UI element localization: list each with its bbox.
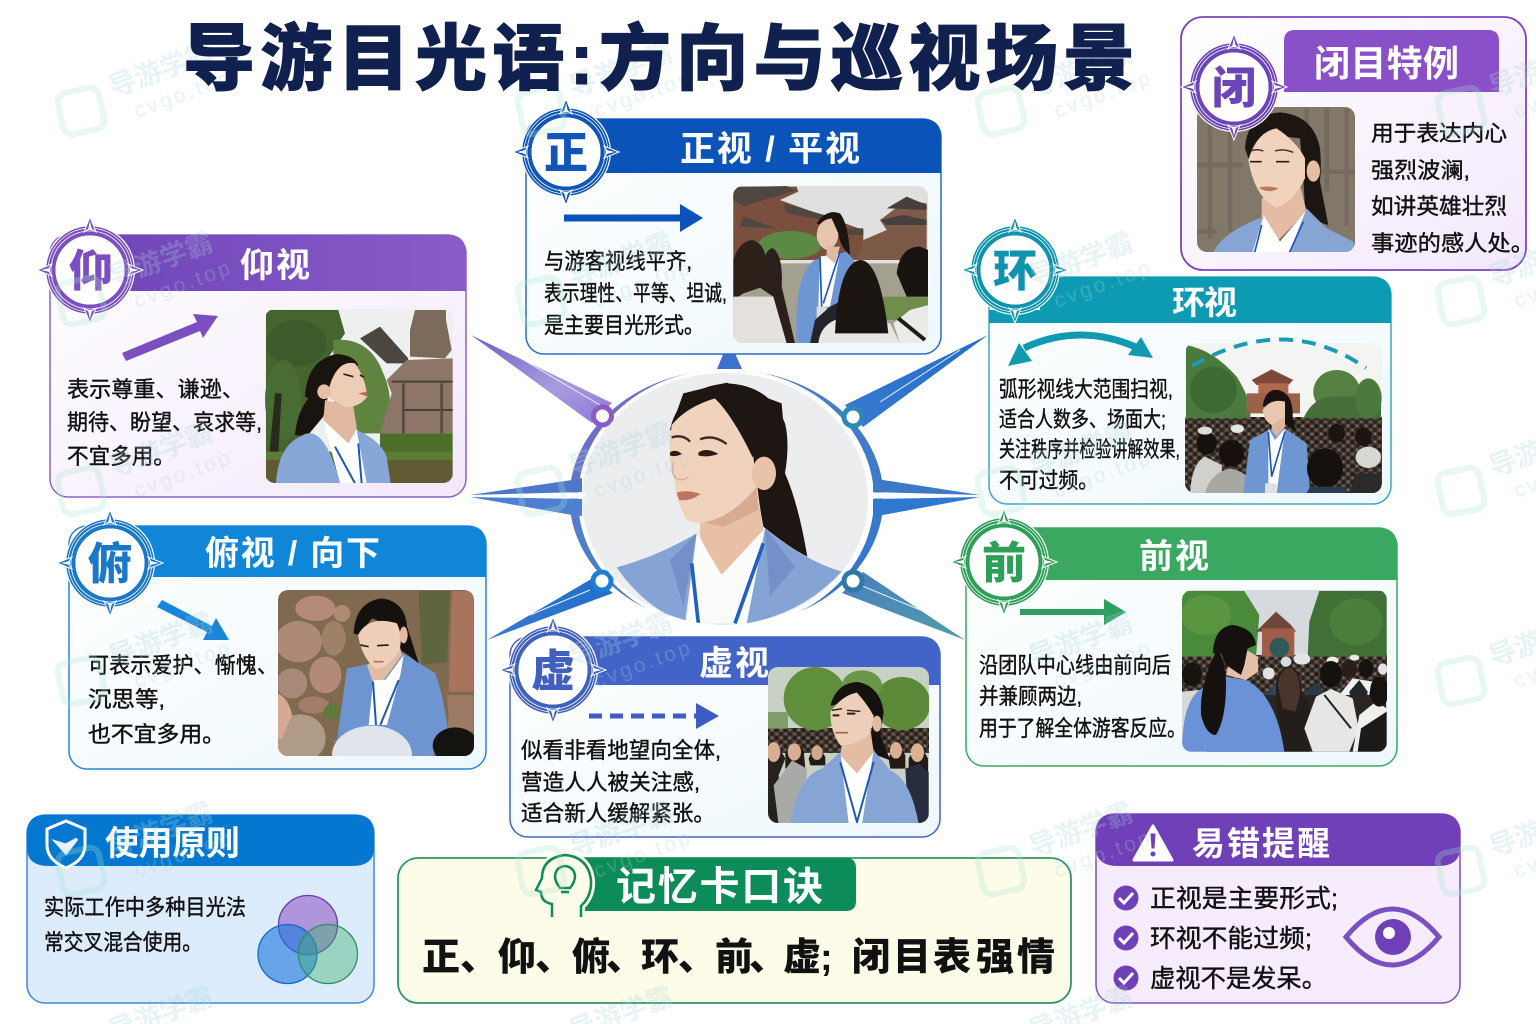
photo: guide scanning crowd xyxy=(1185,343,1382,493)
panel: 易错提醒 xyxy=(1096,814,1460,1003)
icon: venn diagram xyxy=(258,896,358,984)
heading: 记忆卡口诀 xyxy=(616,865,823,909)
panel: 记忆卡口诀 xyxy=(398,855,1071,1003)
icon: compass medal 仰 xyxy=(37,217,143,323)
heading: 易错提醒 xyxy=(1192,825,1330,862)
text block: 如讲英雄壮烈 xyxy=(1371,194,1507,219)
text: cvgo.top xyxy=(131,256,236,313)
text: cvgo.top xyxy=(591,256,696,313)
text block: 沉思等, xyxy=(88,687,165,712)
card header xyxy=(95,235,466,291)
list: reminders xyxy=(1114,885,1338,993)
text: cvgo.top xyxy=(591,66,696,123)
text block: 弧形视线大范围扫视, xyxy=(999,377,1173,402)
panel: 虚视 xyxy=(500,617,940,837)
panel: 俯视 / 向下 xyxy=(57,510,486,784)
text block: 不可过频。 xyxy=(999,468,1098,493)
icon: compass medal 仰: 仰 xyxy=(69,247,113,296)
check icons xyxy=(1114,886,1138,990)
text block: 事迹的感人处。 xyxy=(1371,231,1534,256)
card body xyxy=(50,235,466,497)
text block: 用于了解全体游客反应。 xyxy=(979,716,1186,741)
portrait of guide xyxy=(580,370,870,630)
text: cvgo.top xyxy=(1051,256,1156,313)
text: 导游学霸 xyxy=(565,417,677,482)
card body xyxy=(27,815,374,1003)
text: cvgo.top xyxy=(1051,636,1156,693)
text block: 适合新人缓解紧张。 xyxy=(521,801,715,826)
card body xyxy=(1181,17,1526,270)
card header xyxy=(570,637,940,685)
heading: 前视 xyxy=(1139,538,1209,576)
list: reminders: 虚视不是发呆。 xyxy=(1150,965,1327,993)
text: 导游学霸 xyxy=(1025,607,1137,672)
icon: compass medal 环 xyxy=(962,217,1068,323)
card header xyxy=(1284,30,1499,92)
text block: 表示尊重、谦逊、 xyxy=(67,377,244,402)
text block xyxy=(999,377,1180,493)
heading: 使用原则 xyxy=(105,825,240,863)
text: cvgo.top xyxy=(131,66,236,123)
card header xyxy=(27,815,374,866)
card body xyxy=(510,637,940,837)
panel: 环视 xyxy=(962,217,1391,504)
panel: 使用原则 xyxy=(27,815,374,1003)
heading: 虚视 xyxy=(699,645,769,683)
photo: guide looking down xyxy=(278,590,474,756)
text block: 与游客视线平齐, xyxy=(544,249,692,274)
icon: head with light bulb xyxy=(536,855,591,917)
text block: 期待、盼望、哀求等, xyxy=(67,410,262,435)
card body xyxy=(526,119,941,354)
text: cvgo.top xyxy=(591,636,696,693)
text: cvgo.top xyxy=(131,446,236,503)
text block xyxy=(44,895,246,955)
text block: 也不宜多用。 xyxy=(88,722,225,747)
card body xyxy=(69,526,486,769)
icon: eye xyxy=(1346,909,1439,965)
text block: 可表示爱护、惭愧、 xyxy=(88,653,278,678)
icon: compass medal 前 xyxy=(951,509,1057,615)
text block: 关注秩序并检验讲解效果, xyxy=(999,437,1180,462)
icon: compass medal 正 xyxy=(513,99,619,205)
text: 导游学霸 xyxy=(565,227,677,292)
text block: 并兼顾两边, xyxy=(979,684,1082,709)
heading: 闭目特例 xyxy=(1314,43,1459,84)
heading: 正视 / 平视 xyxy=(680,130,860,169)
mnemonic text: 正、仰、俯、环、前、虚;闭目表强情 xyxy=(422,937,1055,979)
photo: guide facing tourists xyxy=(733,186,928,343)
text: cvgo.top xyxy=(1051,446,1156,503)
text: 导游学霸 xyxy=(565,607,677,672)
text block: 实际工作中多种目光法 xyxy=(44,895,246,920)
text block: 用于表达内心 xyxy=(1371,121,1507,146)
text: 导游学霸 xyxy=(105,417,217,482)
card header xyxy=(580,858,856,911)
icon: compass medal 俯 xyxy=(57,510,163,616)
arrow: dashed gaze xyxy=(589,703,719,729)
icon: compass medal 环: 环 xyxy=(993,247,1037,296)
text: 导游学霸 xyxy=(565,37,677,102)
photo: guide looking up xyxy=(265,309,453,483)
text block: 强烈波澜, xyxy=(1371,158,1470,183)
icon: compass medal 前: 前 xyxy=(982,539,1026,588)
compass ring xyxy=(570,370,884,626)
text block: 表示理性、平等、坦诚, xyxy=(544,281,727,306)
heading: 环视 xyxy=(1172,284,1237,321)
central compass with guide portrait xyxy=(470,335,988,640)
ring nodes xyxy=(593,407,862,590)
heading: 俯视 / 向下 xyxy=(205,535,380,573)
arrow: dashed scan arc on photo xyxy=(1192,339,1366,368)
compass rays xyxy=(470,335,988,640)
text: 导游学霸 xyxy=(105,227,217,292)
icon: compass medal 正: 正 xyxy=(544,129,588,178)
text: 导游学霸 xyxy=(1025,797,1137,862)
text: cvgo.top xyxy=(1051,826,1156,883)
arrow: straight gaze xyxy=(564,204,703,232)
icon: shield xyxy=(47,821,85,868)
card body xyxy=(1096,814,1460,1003)
text block: 沿团队中心线由前向后 xyxy=(979,653,1171,678)
text block xyxy=(88,653,278,747)
panel: 闭目特例 xyxy=(1181,17,1534,270)
text block xyxy=(521,738,721,826)
text: 导游学霸 xyxy=(105,797,217,862)
text: 导游学霸 xyxy=(1025,417,1137,482)
text: 导游学霸 xyxy=(565,797,677,862)
arrow: arc scan xyxy=(1008,335,1153,366)
card header xyxy=(1010,528,1397,580)
icon: compass medal 闭: 闭 xyxy=(1212,64,1256,113)
text: 导游学霸 xyxy=(105,607,217,672)
text block xyxy=(544,249,727,338)
text block xyxy=(979,653,1186,741)
text: cvgo.top xyxy=(591,446,696,503)
text: 导游学霸 xyxy=(105,37,217,102)
card body xyxy=(398,858,1071,1003)
panel: 正视 / 平视 xyxy=(513,99,941,354)
icon: compass medal 俯: 俯 xyxy=(88,540,132,589)
text block: 营造人人被关注感, xyxy=(521,770,700,795)
text block: 适合人数多、场面大; xyxy=(999,407,1166,432)
text block xyxy=(67,377,262,469)
card header xyxy=(989,277,1391,323)
ray gaps xyxy=(565,492,890,498)
arrow: forward gaze xyxy=(1020,599,1126,625)
photo: guide from behind facing group xyxy=(1181,590,1389,752)
card header xyxy=(570,119,941,173)
card body xyxy=(989,277,1391,504)
text: 导游学霸 xyxy=(1025,37,1137,102)
card header xyxy=(1096,814,1460,866)
arrow: upward gaze xyxy=(122,314,218,361)
title: 导游目光语:方向与巡视场景 xyxy=(183,20,1135,100)
text: cvgo.top xyxy=(591,826,696,883)
icon: compass medal 虚: 虚 xyxy=(531,647,575,696)
photo: guide with eyes closed xyxy=(1197,107,1355,255)
panel: 仰视 xyxy=(37,217,466,497)
text block xyxy=(1371,121,1534,256)
icon: warning triangle xyxy=(1134,826,1172,860)
text: cvgo.top xyxy=(131,826,236,883)
text block: 似看非看地望向全体, xyxy=(521,738,721,763)
text block: 是主要目光形式。 xyxy=(544,313,704,338)
card body xyxy=(966,528,1397,766)
list: reminders: 环视不能过频; xyxy=(1150,925,1312,953)
text: cvgo.top xyxy=(1051,66,1156,123)
heading: 仰视 xyxy=(240,247,310,285)
text: 导游学霸 xyxy=(1025,227,1137,292)
text block: 常交叉混合使用。 xyxy=(44,930,202,955)
text block: 不宜多用。 xyxy=(67,444,175,469)
panel: 前视 xyxy=(951,509,1397,766)
arrow: downward gaze xyxy=(157,600,229,640)
icon: compass medal 虚 xyxy=(500,617,606,723)
text: cvgo.top xyxy=(131,636,236,693)
card header xyxy=(115,526,486,577)
list: reminders: 正视是主要形式; xyxy=(1150,885,1338,913)
photo: guide looking over crowd xyxy=(767,667,930,825)
icon: compass medal 闭 xyxy=(1181,34,1287,140)
